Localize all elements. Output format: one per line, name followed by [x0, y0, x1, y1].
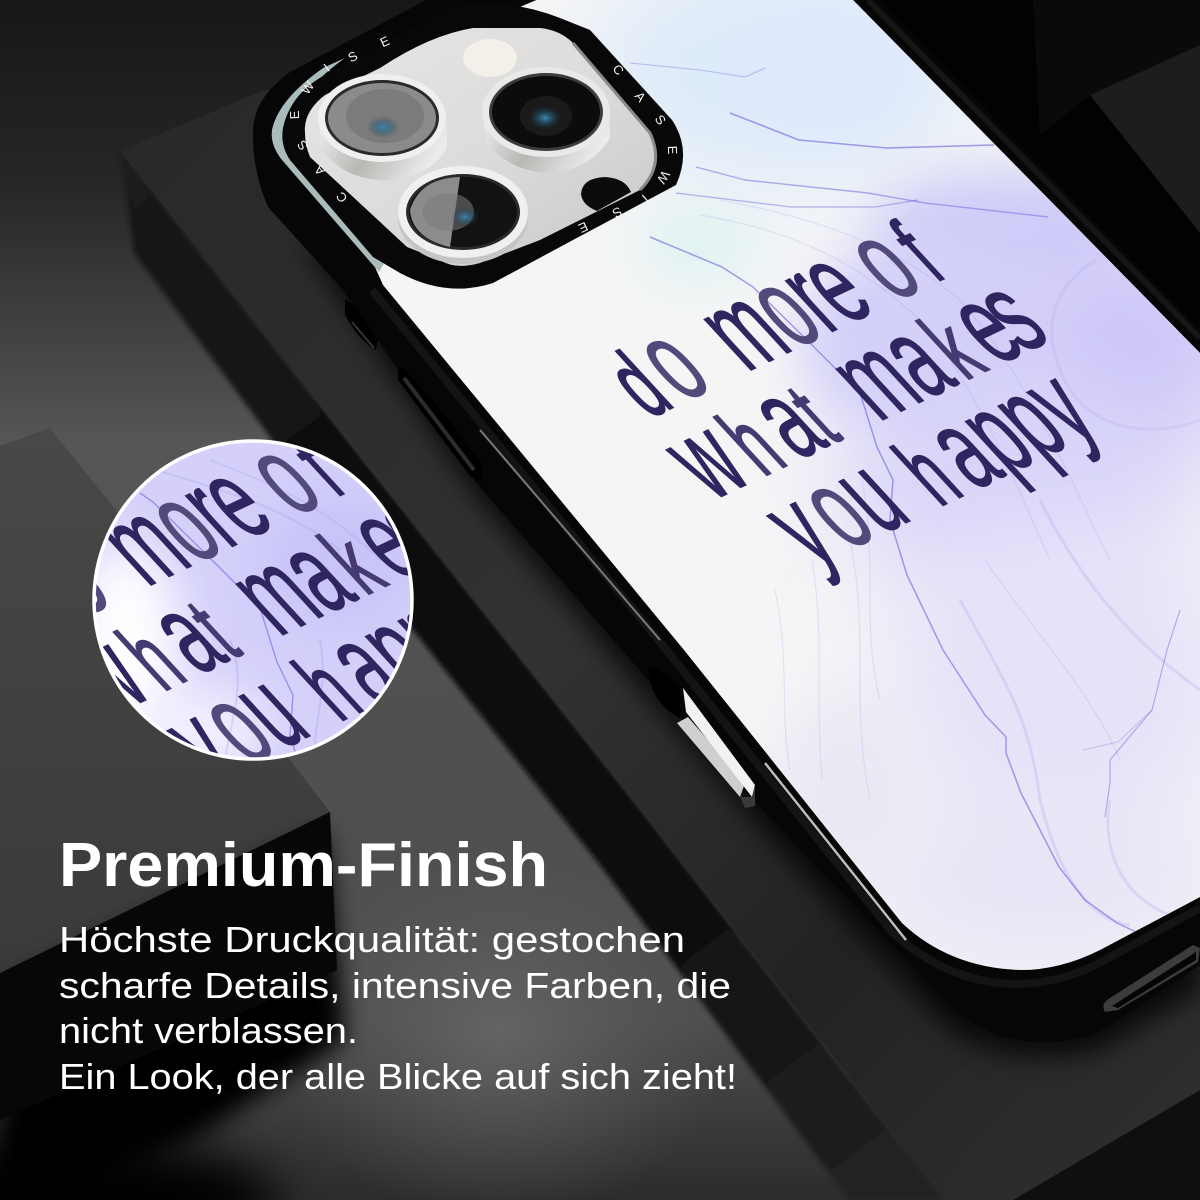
lower-right block [1013, 1090, 1200, 1200]
island window [305, 28, 656, 266]
quote line 3: o [769, 448, 900, 571]
CASEWISE ring lettering [287, 33, 680, 236]
magnified quote text: m [67, 477, 214, 608]
window tinted rim [573, 43, 656, 190]
magnified quote text: m [199, 527, 346, 657]
volume button [398, 368, 482, 482]
body copy: nicht verblassen. [59, 1010, 358, 1051]
circle white ring [94, 441, 412, 759]
CASEWISE ring lettering: W [298, 78, 318, 97]
quote line 2: s [944, 252, 1072, 373]
CASEWISE ring lettering: W [653, 168, 673, 187]
magnified quote text: h [273, 637, 383, 740]
magnified quote text: w [32, 609, 174, 737]
CASEWISE ring lettering: S [610, 204, 625, 221]
magnified quote text: y [133, 681, 261, 803]
magnified quote text: h [97, 607, 206, 710]
quote line 1: f [870, 204, 965, 300]
right edge frame [868, 0, 1200, 338]
CASEWISE ring lettering: A [632, 89, 649, 105]
CASEWISE ring lettering: A [311, 162, 328, 178]
CASEWISE ring lettering: S [652, 112, 669, 128]
magnified quote text: r [148, 453, 266, 569]
magnified quote text [96, 448, 410, 758]
magnified detail circle [92, 439, 414, 761]
magnified quote text: p [361, 572, 492, 694]
magnified quote text: k [299, 512, 406, 613]
speaker slot [1103, 945, 1200, 1012]
magnified quote text: e [317, 479, 448, 601]
printed marble back [375, 0, 1200, 970]
top-right block [1090, 45, 1200, 233]
floor glow [352, 936, 647, 1186]
magnified quote text: a [119, 573, 250, 696]
marble veins [630, 63, 1200, 932]
lidar [581, 177, 631, 211]
quote line 3: y [993, 343, 1121, 464]
quote line 1: e [766, 223, 898, 346]
lens 1 [318, 74, 447, 180]
printed quote [570, 189, 1121, 588]
quote line 1: r [748, 238, 866, 354]
magnified quote text: o [169, 663, 300, 786]
magnified veins [140, 460, 380, 755]
quote line 2: a [848, 296, 979, 419]
quote line 3: a [895, 388, 1026, 511]
magnified quote text: o [4, 515, 135, 638]
lower-left block top [0, 428, 330, 973]
magnified quote text: e [166, 438, 298, 561]
quote line 1: o [604, 300, 735, 423]
action button [345, 300, 378, 350]
body copy: Höchste Druckqualität: gestochen [59, 919, 685, 960]
CASEWISE ring lettering: S [294, 137, 311, 153]
quote line 3: y [733, 466, 861, 588]
quote line 1: o [716, 247, 847, 370]
lens 2 [482, 67, 610, 173]
headline: Premium-Finish [59, 831, 548, 900]
body copy: Ein Look, der alle Blicke auf sich zieht! [59, 1056, 737, 1097]
faint parallel marble lines [700, 200, 1200, 925]
quote line 2: a [719, 358, 850, 481]
CASEWISE ring lettering: I [639, 192, 652, 205]
quote line 3: p [928, 372, 1060, 495]
quote line 1: o [815, 200, 946, 322]
magnified quote text: u [202, 647, 333, 770]
phone soft shadow [300, 240, 1200, 1057]
quote line 3: h [873, 422, 983, 525]
quote line 3: u [802, 432, 933, 555]
camera island [272, 3, 683, 289]
body copy [59, 919, 737, 1097]
quote line 2: h [697, 392, 806, 495]
quote line 2: m [799, 312, 946, 442]
CASEWISE ring lettering: S [345, 48, 360, 65]
magnified quote text: a [295, 603, 426, 726]
CASEWISE ring lettering: I [321, 61, 333, 75]
magnified quote text: o [215, 415, 346, 537]
top-right dark area [880, 0, 1200, 329]
quote line 2: w [632, 394, 774, 522]
quote line 2: k [899, 297, 1006, 398]
CASEWISE ring lettering: E [287, 110, 302, 120]
quote line 3: p [961, 357, 1092, 479]
lower-left block shadowed front [0, 812, 345, 1200]
quote line 2: t [765, 366, 861, 462]
CASEWISE ring lettering: E [378, 33, 392, 50]
edge highlight [480, 430, 906, 940]
CASEWISE ring lettering: E [665, 145, 680, 155]
bumper lip [372, 290, 1200, 984]
circle fill [93, 440, 413, 760]
CASEWISE ring lettering: C [333, 189, 350, 206]
quote line 2: e [917, 264, 1048, 386]
case body [253, 0, 1200, 1042]
camera control button [648, 668, 755, 808]
flash [463, 39, 517, 77]
main block shadow side [120, 151, 945, 1200]
island ring [282, 3, 683, 289]
magnified quote text: p [328, 587, 460, 710]
mint lip of back [272, 58, 385, 272]
magnified quote text: a [248, 511, 379, 634]
quote line 1: d [583, 334, 693, 436]
CASEWISE ring lettering: E [576, 219, 590, 236]
CASEWISE ring lettering: C [610, 61, 627, 78]
lens 3 [398, 166, 528, 264]
magnified quote text: o [116, 462, 247, 585]
quote line 1: m [667, 262, 814, 393]
magnified quote text: y [393, 558, 521, 679]
body copy: scharfe Details, intensive Farben, die [59, 965, 731, 1006]
magnified quote text: f [270, 419, 365, 515]
phone case [253, 0, 1200, 1057]
magnified quote text: t [165, 581, 261, 677]
magnified quote text: s [344, 467, 472, 588]
